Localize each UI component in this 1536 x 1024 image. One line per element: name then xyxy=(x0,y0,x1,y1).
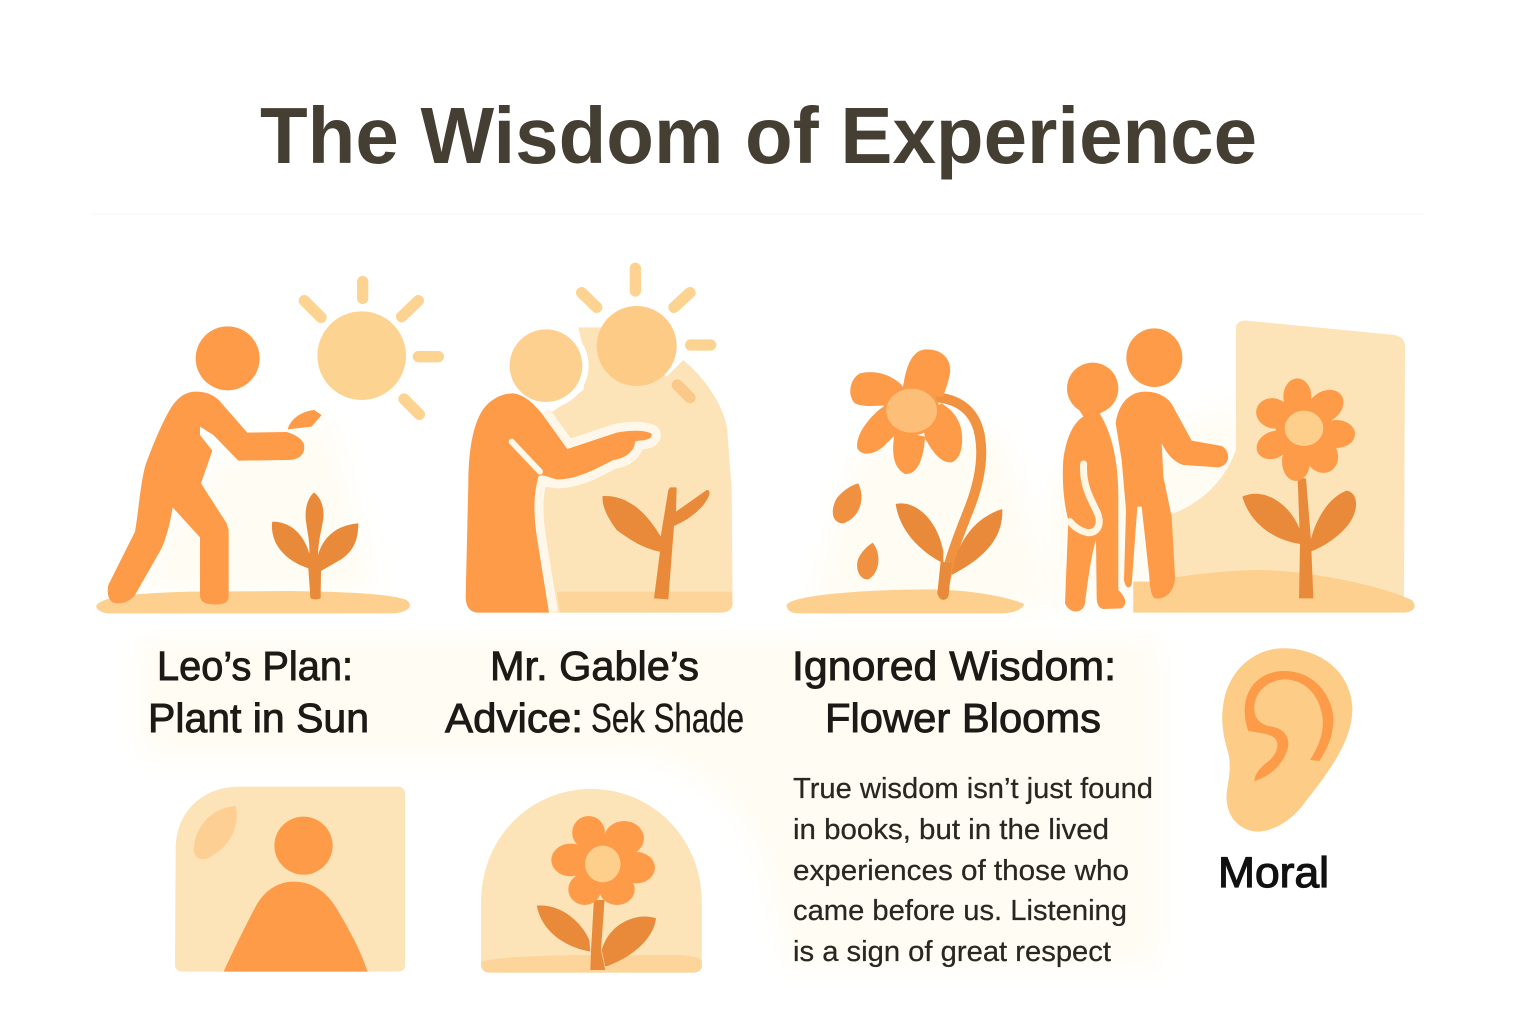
ground xyxy=(557,592,733,613)
ground xyxy=(96,591,410,613)
icon: seedling xyxy=(272,492,358,599)
text block: moral paragraph: in books, but in the lived xyxy=(793,814,1109,846)
icon: healthy flower xyxy=(1242,378,1356,598)
icon: wilted bloom xyxy=(850,349,962,474)
arch background xyxy=(481,789,702,973)
heading: Mr. Gable's advice: Advice: xyxy=(445,695,583,741)
heading: ignored wisdom xyxy=(792,643,1116,741)
text block: moral paragraph: True wisdom isn’t just found xyxy=(793,773,1153,805)
icon: falling petals xyxy=(833,483,878,579)
icon: Leo figure xyxy=(108,326,322,604)
icon: ear xyxy=(1222,648,1352,832)
card background xyxy=(175,787,405,972)
panel: flower icon card xyxy=(481,789,702,973)
icon: bent stem xyxy=(937,397,981,595)
icon: sun xyxy=(304,282,438,414)
shade backdrop xyxy=(537,327,733,613)
icon: leaf xyxy=(194,806,237,859)
panel: Mr. Gable's advice illustration xyxy=(466,268,733,613)
icon: flower xyxy=(537,816,656,970)
backdrop xyxy=(1133,321,1405,612)
text block: moral paragraph: is a sign of great respect xyxy=(793,936,1111,968)
text block: moral paragraph xyxy=(793,773,1153,968)
heading: Mr. Gable's advice: Mr. Gable’s xyxy=(490,643,699,689)
ground xyxy=(787,589,1024,613)
icon: leaves xyxy=(896,503,1002,599)
heading: Leo's plan xyxy=(148,643,369,741)
heading: Leo's plan: Leo’s Plan: xyxy=(157,643,353,689)
panel: ignored wisdom wilted flower illustration xyxy=(787,349,1024,613)
icon: Mr. Gable head xyxy=(503,323,589,408)
ground xyxy=(481,955,702,973)
icon: sun xyxy=(582,268,711,398)
heading: ignored wisdom: Ignored Wisdom: xyxy=(792,643,1116,689)
icon: adult figure xyxy=(1116,328,1228,599)
panel: Leo planting in sun illustration xyxy=(96,282,438,613)
text block: moral paragraph: came before us. Listening xyxy=(793,895,1127,927)
heading: Mr. Gable's advice: Sek Shade xyxy=(591,695,744,741)
icon: child figure xyxy=(1063,363,1125,611)
ground xyxy=(1133,570,1415,613)
panel: person icon card xyxy=(175,787,405,972)
icon: seedling xyxy=(603,487,710,599)
icon: person xyxy=(224,817,367,972)
panel: listening and blooming flower illustration xyxy=(1063,321,1415,613)
heading: Mr. Gable's advice xyxy=(445,643,744,741)
heading: Leo's plan: Plant in Sun xyxy=(148,695,369,741)
heading: ignored wisdom: Flower Blooms xyxy=(825,695,1101,741)
text block: moral paragraph: experiences of those who xyxy=(793,855,1129,887)
label: moral: Moral xyxy=(1218,849,1329,897)
icon: Mr. Gable figure xyxy=(466,393,652,613)
title: The Wisdom of Experience xyxy=(260,91,1257,180)
